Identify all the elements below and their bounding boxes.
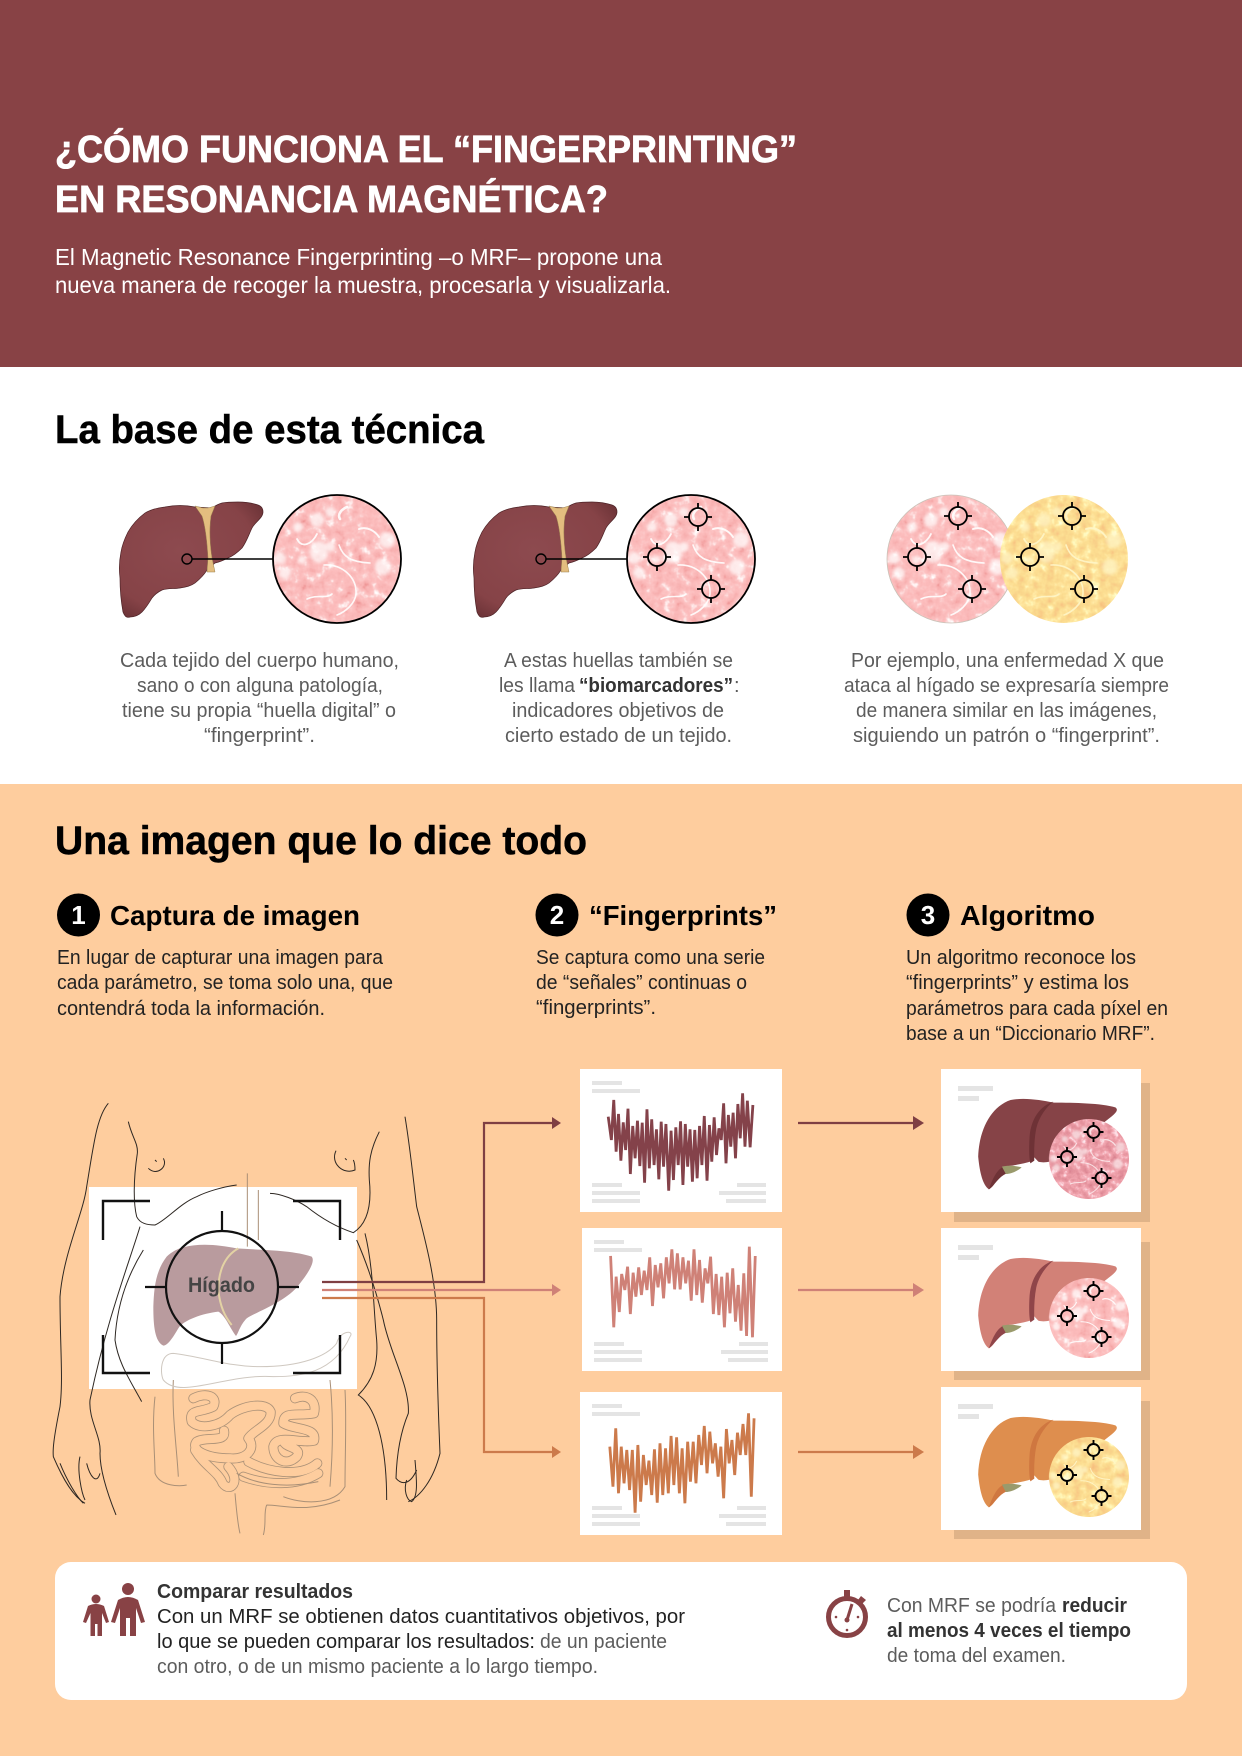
title: EN RESONANCIA MAGNÉTICA? bbox=[55, 177, 608, 221]
text: reducir tiempo: Con MRF se podría bbox=[887, 1595, 1057, 1617]
drawing: intestines bbox=[154, 1332, 351, 1535]
icon: tissue circle bbox=[273, 495, 401, 623]
arrow: dark to algorithm bbox=[798, 1116, 924, 1130]
text: biomarcadores: : bbox=[734, 675, 740, 697]
text: reducir tiempo: reducir bbox=[1062, 1595, 1127, 1617]
target circle bbox=[145, 1211, 299, 1364]
number badge 3: 3 bbox=[921, 900, 935, 930]
liver fissure bbox=[218, 1248, 238, 1325]
title: ¿CÓMO FUNCIONA EL “FINGERPRINTING” bbox=[55, 127, 797, 171]
step heading: Algoritmo bbox=[960, 900, 1095, 931]
number badge 2: 2 bbox=[550, 900, 564, 930]
text: por ejemplo: de manera similar en las imágenes, bbox=[856, 700, 1157, 722]
text: por ejemplo: Por ejemplo, una enfermedad X que bbox=[851, 650, 1164, 672]
panel: header bbox=[0, 0, 1242, 367]
arrow: orange signal bbox=[322, 1298, 561, 1458]
text: biomarcadores bbox=[499, 650, 740, 747]
title bbox=[55, 127, 797, 221]
chart card: dark signal bbox=[580, 1069, 782, 1212]
icon: tissue circle with targets bbox=[627, 495, 755, 623]
subtitle: El Magnetic Resonance Fingerprinting –o MRF– propone una bbox=[55, 244, 662, 270]
text: cada tejido: “fingerprint”. bbox=[204, 725, 315, 747]
text: cada tejido: tiene su propia “huella digital” o bbox=[122, 700, 396, 722]
icon: liver bbox=[978, 1099, 1117, 1189]
icon: liver highlighted bbox=[153, 1245, 313, 1346]
step text: cada parámetro, se toma solo una, que bbox=[57, 972, 393, 994]
step 3: algoritmo bbox=[906, 894, 1168, 1045]
step 1: captura de imagen bbox=[57, 894, 393, 1020]
text: por ejemplo: ataca al hígado se expresaría siempre bbox=[844, 675, 1169, 697]
sample pointer bbox=[182, 554, 273, 564]
text: biomarcadores: A estas huellas también se bbox=[504, 650, 733, 672]
result card: dark liver bbox=[941, 1069, 1150, 1222]
icon: people bbox=[83, 1583, 145, 1636]
text: biomarcadores: cierto estado de un tejido. bbox=[505, 725, 732, 747]
step text: “fingerprints”. bbox=[536, 997, 656, 1019]
step text: parámetros para cada píxel en bbox=[906, 998, 1168, 1020]
step heading: Captura de imagen bbox=[110, 900, 360, 931]
number badge 3 bbox=[906, 894, 950, 936]
step text bbox=[57, 947, 393, 1020]
icon: liver bbox=[119, 502, 263, 617]
panel: liver and tissue sample bbox=[119, 495, 401, 747]
text: reducir tiempo bbox=[887, 1595, 1131, 1667]
heading: la base de esta técnica: La base de esta técnica bbox=[55, 408, 485, 452]
chart card: pink signal bbox=[582, 1228, 782, 1371]
text: comparar resultados: de un paciente bbox=[540, 1631, 667, 1653]
icon: healthy tissue circle bbox=[887, 495, 1015, 623]
text: reducir tiempo: al menos 4 veces el tiempo bbox=[887, 1620, 1131, 1642]
text: comparar resultados: Comparar resultados bbox=[157, 1581, 353, 1603]
arrow: dark signal bbox=[322, 1117, 561, 1282]
arrow: pink to algorithm bbox=[798, 1283, 924, 1297]
step text: base a un “Diccionario MRF”. bbox=[906, 1023, 1155, 1045]
chart card: orange signal bbox=[580, 1392, 782, 1535]
heading: una imagen que lo dice todo: Una imagen que lo dice todo bbox=[55, 819, 587, 863]
number badge 1 bbox=[57, 894, 100, 936]
tissue circle bbox=[1049, 1437, 1129, 1517]
text: comparar resultados: Con un MRF se obtienen datos cuantitativos objetivos, por bbox=[157, 1606, 685, 1628]
icon: stopwatch bbox=[828, 1590, 866, 1636]
step text: Se captura como una serie bbox=[536, 947, 765, 969]
panel: biomarkers bbox=[473, 495, 755, 747]
waveform bbox=[610, 1413, 754, 1513]
icon: liver bbox=[978, 1417, 1117, 1507]
step text: de “señales” continuas o bbox=[536, 972, 747, 994]
text: biomarcadores: les llama bbox=[499, 675, 576, 697]
arrow: pink signal bbox=[322, 1284, 561, 1296]
step text bbox=[906, 947, 1168, 1045]
label: hígado: Hígado bbox=[188, 1274, 255, 1297]
panel: disease pattern bbox=[844, 495, 1169, 747]
step heading: “Fingerprints” bbox=[589, 900, 777, 931]
illustration: torso with liver scan bbox=[53, 1103, 440, 1535]
subtitle bbox=[55, 244, 671, 298]
text: por ejemplo bbox=[844, 650, 1169, 747]
text: cada tejido: Cada tejido del cuerpo humano, bbox=[120, 650, 399, 672]
panel: peach section background bbox=[0, 784, 1242, 1756]
step text bbox=[536, 947, 765, 1019]
step text: contendrá toda la información. bbox=[57, 998, 325, 1020]
text: cada tejido: sano o con alguna patología, bbox=[137, 675, 383, 697]
subtitle: nueva manera de recoger la muestra, procesarla y visualizarla. bbox=[55, 272, 671, 298]
arrow: orange to algorithm bbox=[798, 1445, 924, 1459]
waveform bbox=[608, 1093, 753, 1191]
tissue circle bbox=[1049, 1119, 1129, 1199]
icon: diseased tissue circle bbox=[1000, 495, 1128, 623]
text: comparar resultados: lo que se pueden comparar los resultados: bbox=[157, 1631, 535, 1653]
text: biomarcadores: “biomarcadores” bbox=[579, 675, 733, 697]
text: por ejemplo: siguiendo un patrón o “fingerprint”. bbox=[853, 725, 1160, 747]
text: reducir tiempo: de toma del examen. bbox=[887, 1645, 1066, 1667]
text: comparar resultados bbox=[157, 1581, 685, 1678]
icon: liver bbox=[473, 502, 617, 617]
sample pointer bbox=[536, 554, 627, 564]
step text: “fingerprints” y estima los bbox=[906, 972, 1129, 994]
step text: Un algoritmo reconoce los bbox=[906, 947, 1136, 969]
drawing: body outline bbox=[53, 1103, 440, 1515]
scan background bbox=[89, 1187, 357, 1389]
number badge 2 bbox=[536, 894, 578, 936]
tissue circle bbox=[1049, 1278, 1129, 1358]
result card: orange liver bbox=[941, 1387, 1150, 1539]
text: cada tejido bbox=[120, 650, 399, 747]
panel: bottom callout bbox=[55, 1562, 1187, 1700]
step 2: fingerprints bbox=[536, 894, 777, 1019]
icon: liver bbox=[978, 1258, 1117, 1348]
text: biomarcadores: indicadores objetivos de bbox=[512, 700, 724, 722]
number badge 1: 1 bbox=[71, 900, 86, 930]
result card: pink liver bbox=[941, 1228, 1150, 1380]
viewfinder brackets bbox=[103, 1201, 340, 1373]
waveform bbox=[611, 1247, 755, 1337]
step text: En lugar de capturar una imagen para bbox=[57, 947, 384, 969]
text: comparar resultados: con otro, o de un mismo paciente a lo largo tiempo. bbox=[157, 1656, 598, 1678]
